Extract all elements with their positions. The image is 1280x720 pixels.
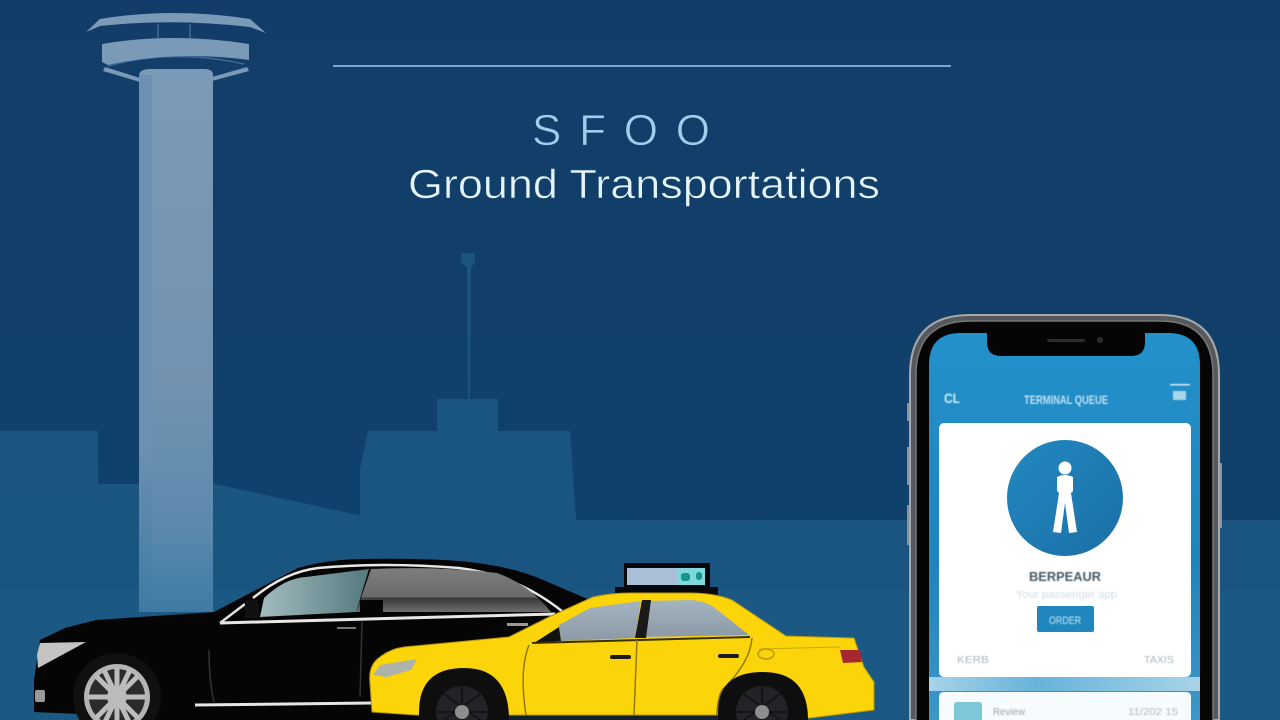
sedan body bbox=[34, 559, 600, 720]
card footer left: KERB bbox=[957, 655, 989, 666]
taxi beltline bbox=[532, 637, 750, 643]
taxi roof sign bbox=[615, 563, 718, 595]
tower cab bbox=[102, 38, 249, 65]
taxi front window bbox=[559, 601, 641, 641]
card footer right: TAXIS bbox=[1144, 655, 1174, 666]
sedan headlight bbox=[37, 642, 86, 668]
phone side buttons bbox=[907, 403, 1222, 545]
taxi rear wheel bbox=[718, 672, 808, 720]
sedan chrome window trim bbox=[253, 565, 563, 612]
person icon bbox=[1053, 462, 1077, 533]
taxi tail light bbox=[840, 650, 862, 663]
profile circle bbox=[1007, 440, 1123, 556]
card button bbox=[1037, 606, 1094, 632]
tower struts bbox=[103, 67, 249, 82]
card button: ORDER bbox=[1049, 615, 1081, 627]
tower cab underside rim bbox=[108, 56, 244, 66]
app header right icon bbox=[1170, 384, 1190, 400]
airport skyline silhouette bbox=[0, 253, 1280, 720]
taxi underbody shadow bbox=[500, 714, 725, 720]
taxi door lines bbox=[523, 638, 752, 715]
sedan front window bbox=[260, 569, 369, 617]
app header title: TERMINAL QUEUE bbox=[1024, 393, 1108, 407]
phone notch bbox=[987, 333, 1145, 356]
taxi headlight bbox=[373, 659, 417, 677]
list thumbnail bbox=[954, 702, 982, 720]
title: Ground Transportations: Ground Transportations bbox=[408, 161, 880, 207]
sedan rear window bbox=[356, 568, 551, 612]
sedan window post bbox=[360, 600, 383, 613]
sedan door lines and handles bbox=[209, 622, 362, 702]
black sedan bbox=[34, 559, 600, 720]
smartphone bbox=[907, 315, 1222, 720]
list label: Review bbox=[993, 707, 1026, 718]
app second card bbox=[939, 692, 1191, 720]
phone frame bbox=[910, 315, 1219, 720]
sedan mirror bbox=[245, 600, 260, 618]
sedan fog light bbox=[35, 690, 45, 702]
phone screen bbox=[929, 333, 1200, 720]
taxi body bbox=[370, 593, 874, 718]
control tower bbox=[86, 13, 266, 612]
taxi trunk line and fuel cap bbox=[759, 647, 840, 649]
tower window mullions bbox=[158, 24, 190, 38]
building: left terminal bbox=[0, 431, 362, 720]
list value: 11/202 15 bbox=[1128, 707, 1178, 718]
card title: BERPEAUR bbox=[1029, 569, 1102, 584]
sedan wheel bbox=[73, 653, 161, 720]
taxi door handles bbox=[610, 655, 631, 659]
taxi front wheel bbox=[419, 668, 509, 720]
taxi pillar bbox=[635, 600, 651, 638]
title: SFOO: SFOO bbox=[532, 106, 710, 155]
taxi rear window bbox=[643, 600, 749, 637]
notch speaker and camera bbox=[1047, 337, 1103, 343]
building: central terminal with antenna bbox=[360, 253, 1280, 720]
header line bbox=[333, 65, 951, 67]
tower shaft bbox=[139, 69, 213, 612]
ground band bbox=[0, 590, 1280, 720]
app main card bbox=[939, 423, 1191, 677]
app header left icon: CL bbox=[944, 390, 960, 406]
card subtitle: Your passenger app bbox=[1016, 589, 1117, 601]
taxi mirror bbox=[534, 627, 561, 643]
sedan bottom chrome bbox=[195, 703, 372, 705]
divider strip bbox=[929, 677, 1200, 691]
tower roof bbox=[86, 13, 266, 33]
yellow taxi bbox=[370, 563, 874, 720]
